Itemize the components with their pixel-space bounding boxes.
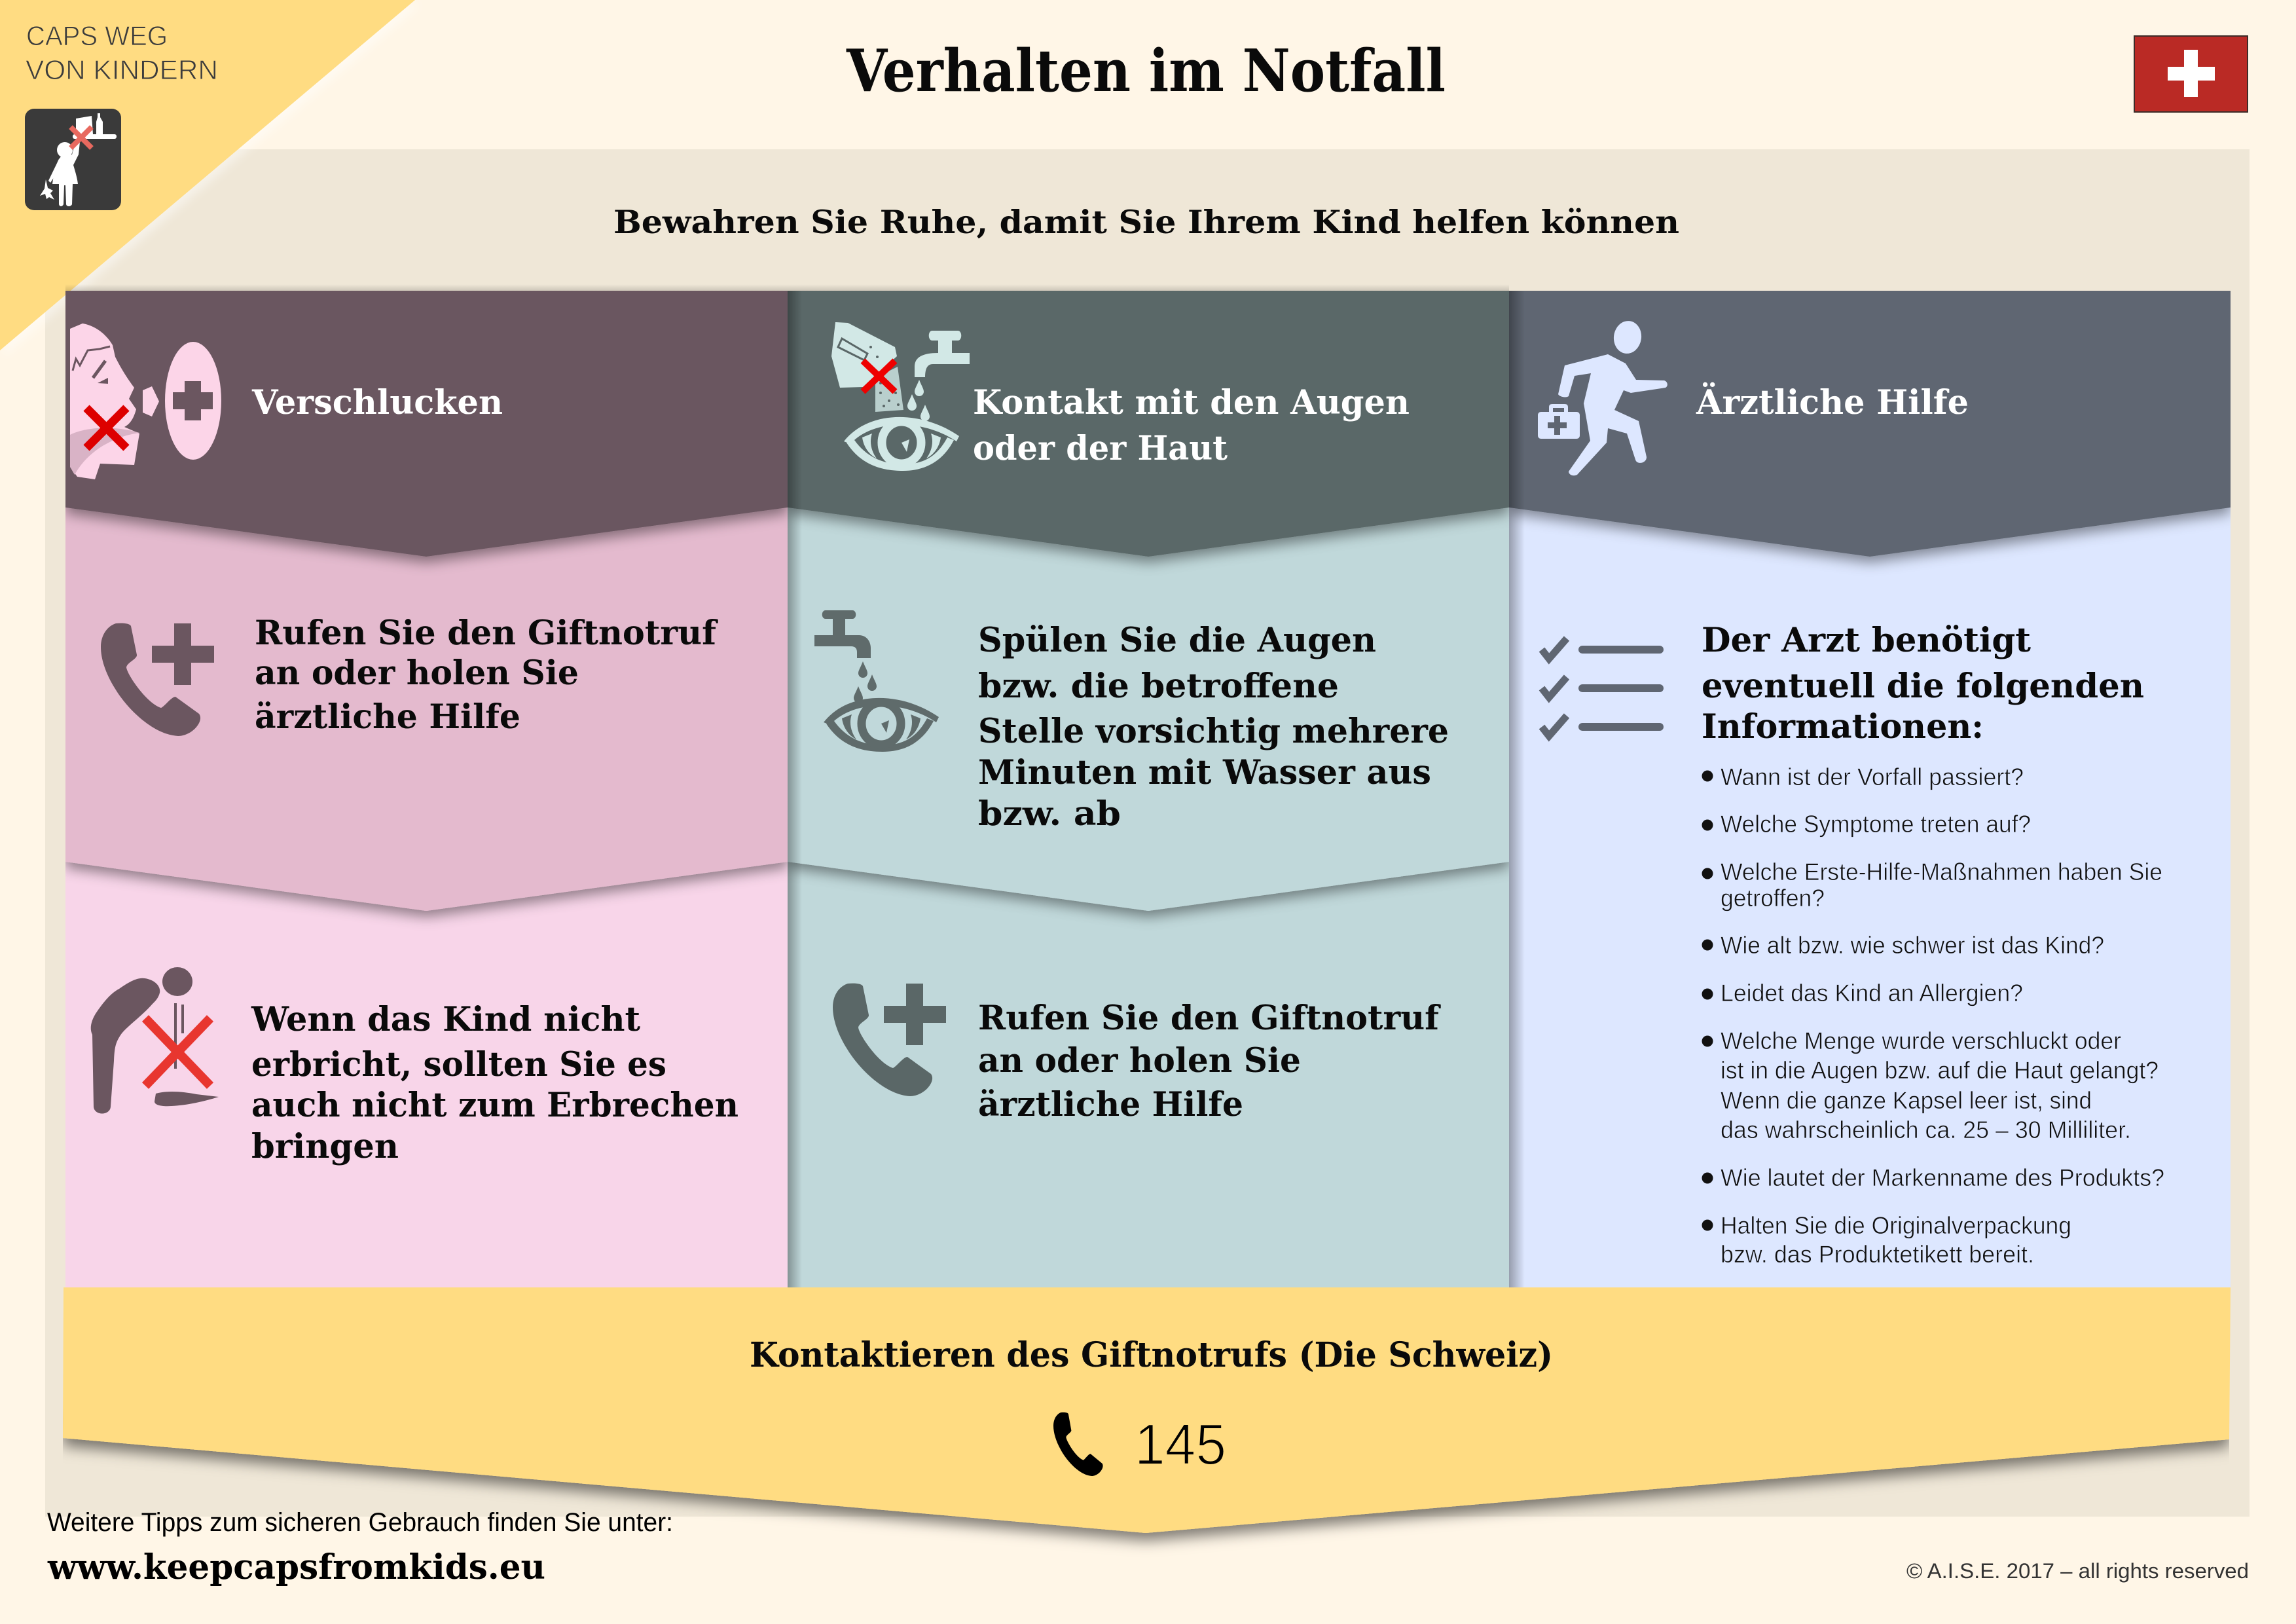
icon: telephone bbox=[1053, 1412, 1103, 1476]
heading line 2: oder der Haut bbox=[973, 429, 1228, 468]
line 3: auch nicht zum Erbrechen bbox=[251, 1086, 738, 1125]
line 2: erbricht, sollten Sie es bbox=[251, 1045, 666, 1084]
subtitle: Bewahren Sie Ruhe, damit Sie Ihrem Kind helfen können bbox=[613, 203, 1679, 241]
bullet list: doctor questions: Wenn die ganze Kapsel leer ist, sind bbox=[1721, 1087, 2092, 1114]
line 2: an oder holen Sie bbox=[255, 654, 579, 693]
bullet list: doctor questions: Halten Sie die Originalverpackung bbox=[1721, 1212, 2071, 1239]
heading: contact poison hotline: Kontaktieren des Giftnotrufs (Die Schweiz) bbox=[750, 1335, 1553, 1375]
title: Verhalten im Notfall bbox=[846, 36, 1446, 105]
icon: tap rinsing eye bbox=[814, 610, 939, 752]
bullet list: doctor questions bbox=[1702, 764, 2164, 1268]
line 3: ärztliche Hilfe bbox=[255, 697, 520, 737]
bullet list: doctor questions: getroffen? bbox=[1721, 885, 1825, 912]
line 1: Rufen Sie den Giftnotruf bbox=[978, 999, 1441, 1038]
bullet list: doctor questions: das wahrscheinlich ca. 25 – 30 Milliliter. bbox=[1721, 1116, 2131, 1143]
text: do not induce vomiting bbox=[251, 1000, 738, 1166]
icon: face swallowing with medical cross bbox=[70, 323, 221, 479]
line 3: Informationen: bbox=[1702, 707, 1984, 747]
bullet list: doctor questions: Wie lautet der Markenname des Produkts? bbox=[1721, 1164, 2164, 1191]
bullet list: doctor questions: ist in die Augen bzw. auf die Haut gelangt? bbox=[1721, 1057, 2159, 1084]
corner label: caps away from children bbox=[26, 20, 218, 85]
bullet list: doctor questions: Welche Erste-Hilfe-Maßnahmen haben Sie bbox=[1721, 858, 2162, 885]
footer: more tips: Weitere Tipps zum sicheren Gebrauch finden Sie unter: bbox=[47, 1508, 673, 1537]
bullet list: doctor questions: Welche Menge wurde verschluckt oder bbox=[1721, 1027, 2121, 1054]
icon: phone with plus (Augen) bbox=[833, 984, 946, 1096]
icon: running person with first-aid kit bbox=[1538, 319, 1667, 475]
heading: Kontakt mit den Augen oder der Haut bbox=[973, 383, 1410, 468]
line 2: an oder holen Sie bbox=[978, 1041, 1301, 1080]
line 1: Der Arzt benötigt bbox=[1702, 621, 2031, 660]
icon: capsule, tap and eye bbox=[831, 322, 970, 471]
line 1: Wenn das Kind nicht bbox=[251, 1000, 640, 1039]
line 5: bzw. ab bbox=[978, 794, 1121, 834]
yellow corner triangle bbox=[0, 0, 415, 350]
hotline number: 145 bbox=[1135, 1412, 1226, 1477]
icon: bending person, do not induce vomiting bbox=[91, 967, 219, 1113]
line 3: ärztliche Hilfe bbox=[978, 1085, 1243, 1124]
line 3: Stelle vorsichtig mehrere bbox=[978, 712, 1449, 751]
line 2: bzw. die betroffene bbox=[978, 667, 1339, 706]
bullet list: doctor questions: Leidet das Kind an Allergien? bbox=[1721, 980, 2023, 1006]
bullet list: doctor questions: Welche Symptome treten auf? bbox=[1721, 811, 2031, 838]
heading: doctor information bbox=[1702, 621, 2144, 747]
line 1: Spülen Sie die Augen bbox=[978, 621, 1376, 660]
footer: copyright: © A.I.S.E. 2017 – all rights reserved bbox=[1906, 1559, 2249, 1583]
text: call poison hotline (Verschlucken) bbox=[255, 614, 718, 737]
heading: Verschlucken: Verschlucken bbox=[251, 383, 503, 422]
corner text line 2: VON KINDERN bbox=[26, 54, 218, 85]
heading line 1: Kontakt mit den Augen bbox=[973, 383, 1410, 422]
bullet list: doctor questions: Wie alt bzw. wie schwer ist das Kind? bbox=[1721, 932, 2104, 959]
bullet list: doctor questions: Wann ist der Vorfall passiert? bbox=[1721, 764, 2024, 790]
bullet list: doctor questions: bzw. das Produktetikett bereit. bbox=[1721, 1241, 2034, 1268]
icon: phone with plus (Verschlucken) bbox=[101, 623, 214, 736]
footer: website: www.keepcapsfromkids.eu bbox=[47, 1547, 545, 1587]
icon: checklist bbox=[1542, 638, 1664, 736]
heading: Ärztliche Hilfe: Ärztliche Hilfe bbox=[1696, 382, 1969, 422]
panel: poison hotline banner bbox=[63, 1287, 2231, 1533]
icon: child reaching shelf bbox=[25, 109, 121, 210]
panel: Verschlucken column backgrounds bbox=[65, 291, 788, 1287]
icon: Swiss flag bbox=[2134, 36, 2248, 112]
line 2: eventuell die folgenden bbox=[1702, 667, 2144, 706]
panel: Ärztliche Hilfe column backgrounds bbox=[1509, 291, 2231, 1287]
text: rinse eyes bbox=[978, 621, 1449, 834]
corner text line 1: CAPS WEG bbox=[26, 20, 168, 51]
line 4: Minuten mit Wasser aus bbox=[978, 753, 1431, 792]
line 4: bringen bbox=[251, 1127, 399, 1166]
text: call poison hotline (Augen) bbox=[978, 999, 1441, 1124]
panel: Augen/Haut column backgrounds bbox=[788, 291, 1509, 1287]
line 1: Rufen Sie den Giftnotruf bbox=[255, 614, 718, 653]
